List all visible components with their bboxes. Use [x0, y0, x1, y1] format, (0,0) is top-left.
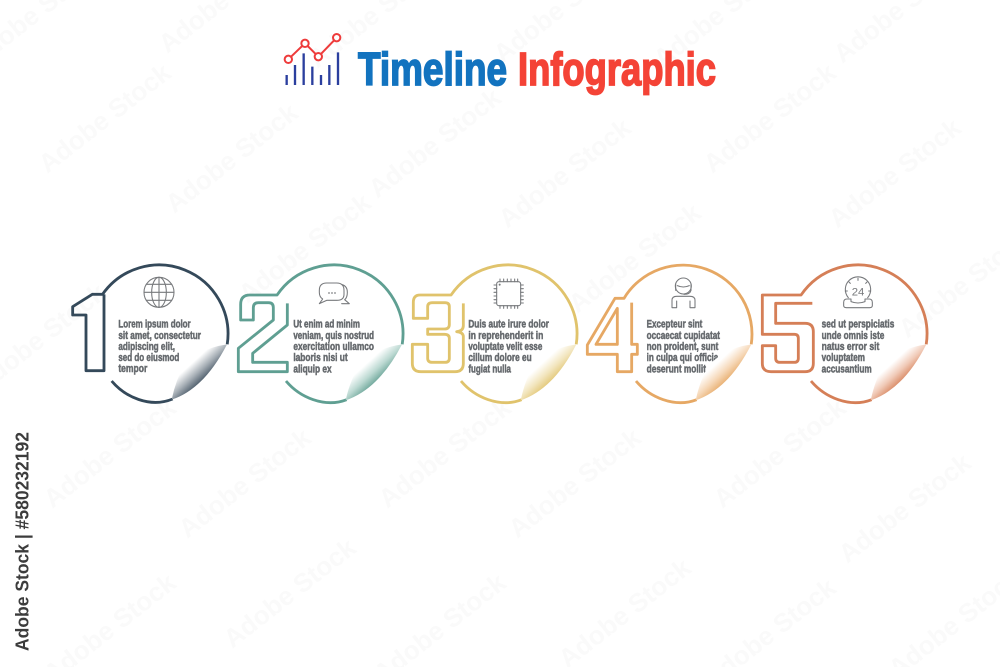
icon: microchip — [494, 279, 523, 308]
icon: globe — [144, 277, 174, 307]
number 1 and circle outline — [73, 265, 228, 371]
panel: step 4 — [587, 265, 752, 403]
stock id caption: Adobe Stock | #580232192 — [12, 432, 32, 651]
circle lower arc — [286, 381, 347, 403]
watermark: Adobe Stock — [833, 447, 977, 569]
text block: unde omnis iste — [822, 330, 884, 342]
number 4 and circle outline — [587, 265, 752, 372]
page curl — [346, 344, 402, 400]
watermark: Adobe Stock — [698, 57, 842, 179]
icon: chart logo — [285, 34, 340, 85]
text block: tempor — [118, 363, 147, 375]
number 5 and circle outline — [762, 265, 927, 372]
panel: step 5 — [762, 265, 927, 403]
text block: sit amet, consectetur — [118, 330, 201, 342]
text block — [118, 318, 201, 375]
text block: natus error sit — [822, 341, 880, 353]
circle lower arc — [461, 381, 522, 403]
text block: in reprehenderit in — [468, 330, 543, 342]
text block: accusantium — [822, 363, 872, 375]
watermark: Adobe Stock — [493, 112, 637, 234]
watermark: Adobe Stock — [38, 392, 182, 514]
text block: exercitation ullamco — [293, 341, 374, 353]
watermark: Adobe Stock — [823, 112, 967, 234]
icon: 24 hour phone — [844, 277, 872, 308]
text block: voluptate velit esse — [468, 341, 542, 353]
text block: sed ut perspiciatis — [822, 318, 894, 330]
watermark: Adobe Stock — [233, 187, 377, 309]
text block: veniam, quis nostrud — [293, 330, 374, 342]
text block: fugiat nulla — [468, 363, 511, 375]
watermark: Adobe Stock — [708, 392, 852, 514]
text block: Lorem ipsum dolor — [118, 318, 191, 330]
panel: step 2 — [238, 265, 403, 403]
text block: non proident, sunt — [647, 341, 719, 353]
page curl — [696, 344, 751, 400]
title — [358, 43, 716, 95]
title: Infographic — [518, 43, 716, 95]
text block: Ut enim ad minim — [293, 318, 360, 330]
watermark: Adobe Stock — [503, 422, 647, 544]
text block: in culpa qui officia — [647, 352, 718, 364]
text block: deserunt mollit — [647, 363, 706, 375]
text block: laboris nisi ut — [293, 352, 348, 364]
panel: step 3 — [412, 265, 577, 403]
text block: voluptatem — [822, 352, 865, 364]
panel: step 1 — [73, 265, 228, 402]
watermark: Adobe Stock — [363, 82, 507, 204]
text block: aliquip ex — [293, 363, 332, 375]
page curl — [172, 344, 227, 400]
text block: sed do eiusmod — [118, 352, 179, 364]
text block — [822, 318, 894, 375]
circle lower arc — [636, 381, 697, 403]
text block — [647, 318, 720, 375]
text block: Duis aute irure dolor — [468, 318, 549, 330]
icon: chat bubbles — [319, 283, 349, 304]
page curl — [521, 344, 576, 400]
watermark: Adobe Stock — [160, 97, 304, 219]
text block: occaecat cupidatat — [647, 330, 720, 342]
page curl — [871, 344, 926, 400]
circle lower arc — [112, 381, 173, 402]
circle lower arc — [811, 381, 872, 403]
text block: Excepteur sint — [647, 318, 703, 330]
text block: cillum dolore eu — [468, 352, 532, 364]
watermark: Adobe Stock — [563, 197, 707, 319]
text block: adipiscing elit, — [118, 341, 175, 353]
watermark: Adobe Stock — [373, 392, 517, 514]
number 4 inner triangle — [596, 308, 617, 344]
title: Timeline — [358, 43, 507, 95]
icon: 24 hour phone: 24 — [852, 287, 864, 299]
watermark: Adobe Stock — [33, 57, 177, 179]
watermark: Adobe Stock — [173, 422, 317, 544]
number 3 and circle outline — [412, 265, 577, 372]
number 2 and circle outline — [238, 265, 403, 372]
icon: headset operator — [672, 278, 695, 308]
text block — [468, 318, 549, 375]
watermark: Adobe Stock — [218, 532, 362, 654]
text block — [293, 318, 374, 375]
